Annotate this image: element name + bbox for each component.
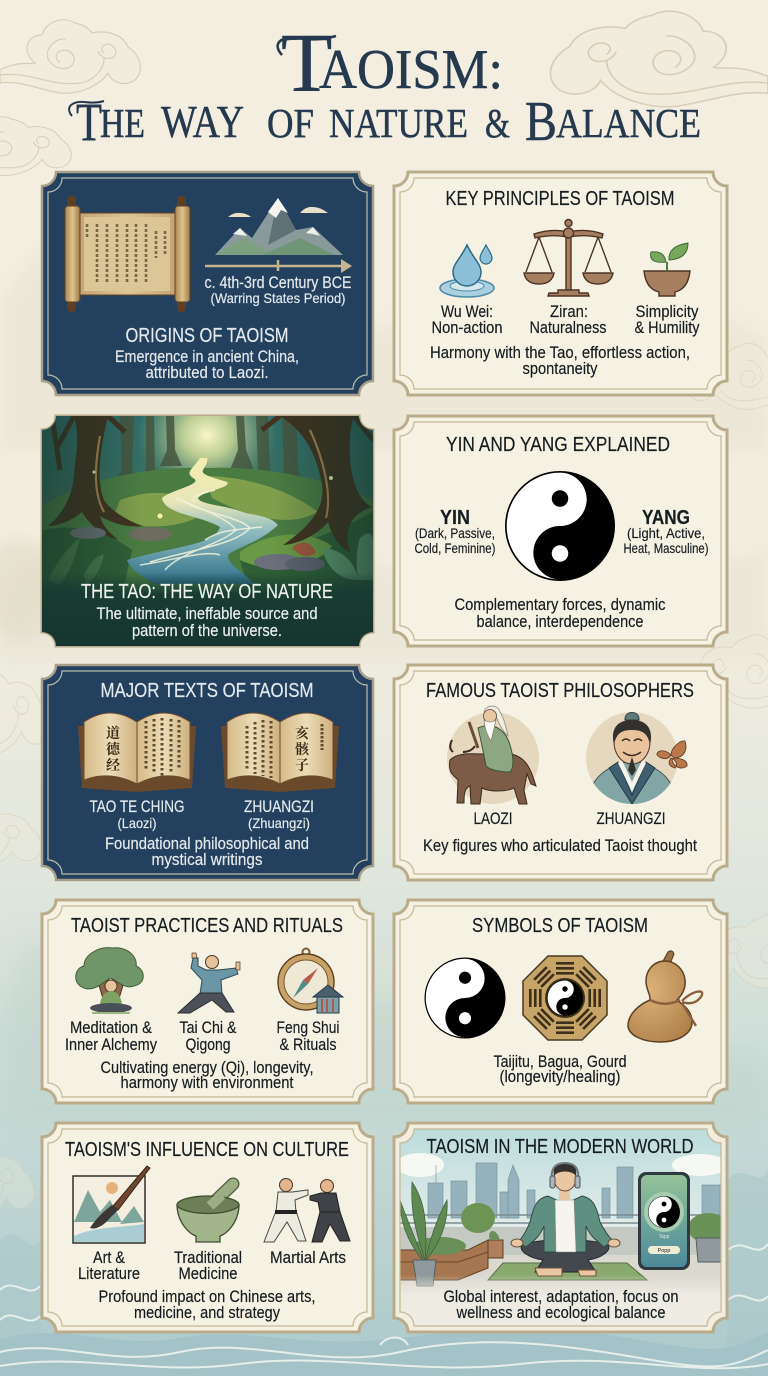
labels: Traditional [174, 1249, 242, 1267]
text block [454, 596, 666, 631]
text block: (longevity/healing) [500, 1068, 620, 1086]
labels: Naturalness [530, 319, 606, 337]
text block: attributed to Laozi. [146, 364, 268, 382]
heading: TAOISM IN THE MODERN WORLD [426, 1136, 694, 1158]
icon: open book Tao Te Ching: 道 [106, 723, 120, 743]
text block: Harmony with the Tao, effortless action, [430, 344, 690, 362]
heading: KEY PRINCIPLES OF TAOISM [446, 188, 674, 210]
heading: TAOISM'S INFLUENCE ON CULTURE [65, 1139, 349, 1161]
text block: mystical writings [152, 851, 262, 869]
title: WAY [161, 96, 244, 147]
icon: compass and pagoda [278, 948, 343, 1013]
text block [494, 1053, 626, 1086]
text block: Foundational philosophical and [105, 835, 309, 853]
text block: Key figures who articulated Taoist thought [423, 837, 697, 855]
heading: SYMBOLS OF TAOISM [472, 915, 648, 937]
heading: ORIGINS OF TAOISM [126, 325, 288, 347]
panel: key principles [394, 172, 727, 395]
forest scene [42, 416, 373, 646]
icon: plant in bowl [644, 243, 690, 296]
date label: (Warring States Period) [210, 290, 346, 306]
date label [204, 274, 352, 306]
text block: Cultivating energy (Qi), longevity, [100, 1059, 314, 1077]
icon: open book Tao Te Ching [78, 713, 196, 792]
icon: taijitu [424, 958, 506, 1038]
labels: Qigong [186, 1036, 230, 1054]
icon: scroll [65, 196, 190, 312]
icon: open book Zhuangzi: 骸 [295, 739, 310, 759]
book labels: ZHUANGZI [244, 798, 314, 816]
heading: FAMOUS TAOIST PHILOSOPHERS [426, 680, 694, 702]
yin label [414, 507, 496, 556]
heading: YIN AND YANG EXPLAINED [446, 434, 670, 456]
rooftop scene [400, 1130, 720, 1291]
text block [444, 1288, 678, 1322]
portrait names: ZHUANGZI [596, 810, 666, 828]
title: B [525, 91, 557, 153]
panel: influence on culture [42, 1123, 373, 1332]
title: AOISM: [319, 39, 503, 101]
yang label: Heat, Masculine) [624, 540, 708, 556]
panel: symbols [394, 900, 727, 1103]
icon: balance scale [524, 220, 613, 296]
text block [98, 1288, 316, 1322]
panel: practices and rituals [42, 900, 373, 1103]
icon: open book Tao Te Ching: 德 [106, 739, 121, 759]
icon: gourd [628, 951, 702, 1042]
yin label: (Dark, Passive, [415, 525, 495, 541]
title: T [281, 17, 332, 110]
yang label: YANG [642, 507, 690, 529]
butterfly [657, 741, 687, 768]
labels [65, 1019, 340, 1054]
trees [48, 416, 143, 540]
icon: open book Zhuangzi: 子 [295, 755, 309, 775]
labels: Inner Alchemy [65, 1036, 158, 1054]
title [69, 17, 701, 153]
icon: taijitu [505, 471, 615, 581]
text block: balance, interdependence [476, 613, 644, 631]
heading: THE TAO: THE WAY OF NATURE [81, 581, 333, 603]
panel: the Tao [40, 414, 374, 648]
mat [488, 1263, 647, 1280]
icon: open book Zhuangzi: 亥 [295, 723, 309, 743]
labels [432, 303, 700, 337]
text block: Complementary forces, dynamic [454, 596, 666, 614]
title: NATURE [329, 100, 468, 146]
phone [638, 1172, 690, 1270]
labels: Literature [78, 1265, 140, 1283]
title: T [76, 92, 102, 152]
portrait names [474, 810, 666, 828]
labels: Feng Shui [276, 1019, 340, 1037]
labels: Meditation & [70, 1019, 152, 1037]
book labels: (Zhuangzi) [248, 815, 310, 831]
portrait: Laozi on ox [447, 706, 539, 804]
planter and plants [461, 1203, 495, 1233]
portrait names: LAOZI [474, 810, 512, 828]
rocks and foliage [128, 527, 172, 541]
text block: Profound impact on Chinese arts, [98, 1288, 316, 1306]
text block [115, 348, 299, 382]
heading: MAJOR TEXTS OF TAOISM [100, 680, 314, 702]
river [127, 458, 278, 584]
labels: Tai Chi & [180, 1019, 236, 1037]
text block [96, 605, 318, 640]
title: HE [100, 100, 145, 146]
book labels [90, 798, 314, 831]
icon: martial artists [264, 1178, 350, 1242]
yin label: YIN [440, 507, 470, 529]
date label: c. 4th-3rd Century BCE [204, 274, 352, 292]
icon: painting and brush [73, 1166, 150, 1243]
icon: tai chi figure [178, 953, 240, 1013]
labels [78, 1249, 346, 1283]
title: ALANCE [556, 100, 701, 146]
text block: The ultimate, ineffable source and [96, 605, 318, 623]
text block: pattern of the universe. [132, 622, 282, 640]
icon: bagua [523, 956, 607, 1040]
book labels: TAO TE CHING [90, 798, 184, 816]
text block: harmony with environment [120, 1074, 294, 1092]
icon: water drop [440, 245, 494, 297]
labels: Wu Wei: [441, 303, 493, 321]
timeline arrow [205, 259, 352, 273]
icon: open book Zhuangzi [221, 713, 339, 792]
text block: Global interest, adaptation, focus on [444, 1288, 678, 1306]
text block [100, 1059, 314, 1092]
book labels: (Laozi) [118, 815, 156, 831]
text block: Emergence in ancient China, [115, 348, 299, 366]
yang label: (Light, Active, [627, 525, 705, 541]
text block: medicine, and strategy [134, 1304, 281, 1322]
icon: mortar and pestle [177, 1184, 239, 1242]
portrait: Zhuangzi [586, 712, 687, 810]
text block: Taijitu, Bagua, Gourd [494, 1053, 626, 1071]
panel: philosophers [394, 665, 727, 880]
labels: & Rituals [280, 1036, 336, 1054]
icon: meditation under tree [76, 948, 143, 1013]
title: OF [267, 100, 314, 146]
text block: spontaneity [522, 360, 598, 378]
labels: & Humility [634, 319, 700, 337]
labels: Simplicity [636, 303, 699, 321]
labels: Art & [93, 1249, 125, 1267]
icon: open book Tao Te Ching: 经 [106, 755, 121, 775]
phone: Tapp [659, 1234, 670, 1240]
labels: Ziran: [550, 303, 588, 321]
panel: yin and yang [394, 416, 727, 646]
text block: wellness and ecological balance [456, 1304, 666, 1322]
yin label: Cold, Feminine) [414, 540, 496, 556]
labels: Non-action [432, 319, 502, 337]
meditating person [511, 1163, 620, 1276]
yang label [624, 507, 708, 556]
panel: origins of Taoism [42, 172, 373, 395]
labels: Medicine [178, 1265, 238, 1283]
text block [430, 344, 690, 378]
labels: Martial Arts [270, 1249, 346, 1267]
phone: Popp [658, 1248, 670, 1254]
icon: mountains and clouds [215, 198, 343, 255]
heading: TAOIST PRACTICES AND RITUALS [71, 915, 343, 937]
panel: Taoism in the modern world [394, 1123, 728, 1332]
title: & [485, 100, 510, 146]
panel: major texts [42, 665, 373, 880]
text block [105, 835, 309, 869]
